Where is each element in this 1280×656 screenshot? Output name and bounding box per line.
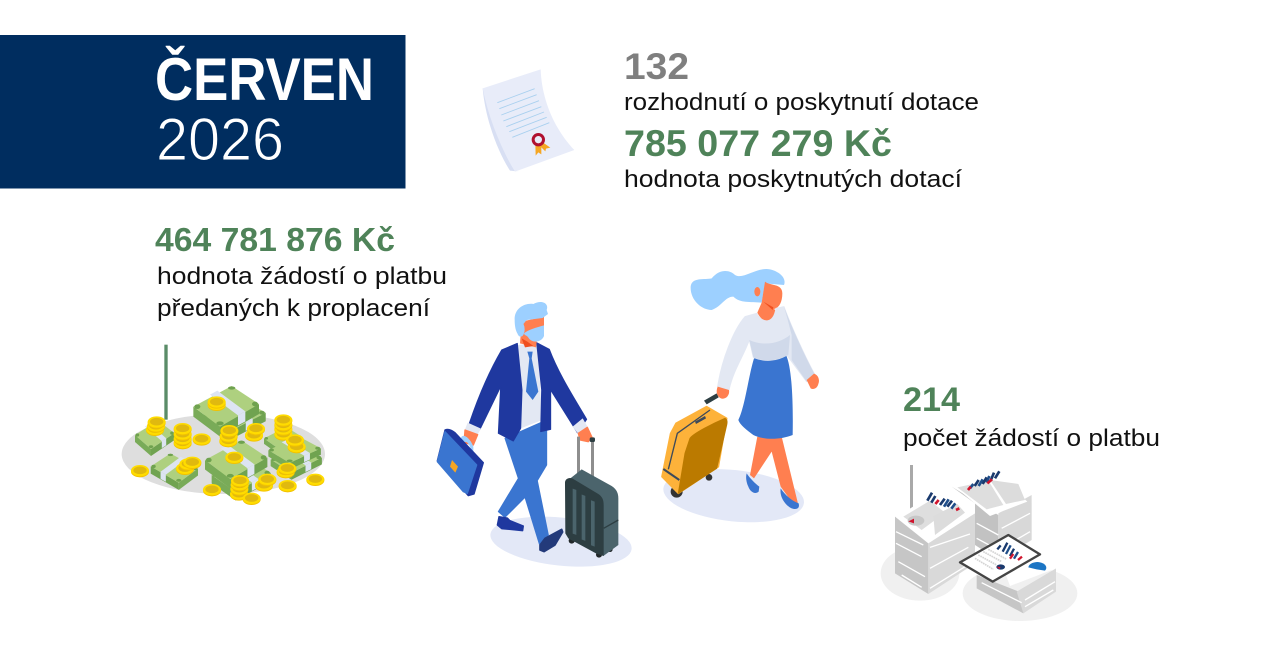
skirt bbox=[738, 355, 793, 439]
icon: paper stacks bbox=[881, 465, 1077, 621]
yellow suitcase bbox=[662, 393, 727, 498]
illustration: woman with suitcase bbox=[661, 269, 819, 529]
cash bundles bbox=[135, 386, 322, 500]
label: grants value: hodnota poskytnutých dotací bbox=[624, 166, 962, 193]
briefcase bbox=[437, 429, 483, 496]
coins bbox=[131, 396, 324, 505]
label: payment requests value bbox=[157, 263, 447, 322]
stat: payment requests value: 464 781 876 Kč bbox=[155, 222, 395, 259]
label: payment requests value: předaných k proplacení bbox=[157, 295, 430, 322]
icon: money pile bbox=[122, 345, 325, 505]
tie bbox=[526, 352, 538, 400]
title: month: ČERVEN bbox=[155, 46, 374, 113]
label: payment requests value: hodnota žádostí o platbu bbox=[157, 263, 447, 290]
title banner bbox=[0, 35, 406, 188]
jacket bbox=[469, 343, 522, 441]
trousers bbox=[498, 420, 548, 544]
front left stack bbox=[895, 489, 975, 594]
shirt bbox=[517, 343, 542, 428]
blouse bbox=[718, 307, 815, 390]
tablet on front stack bbox=[960, 535, 1056, 613]
rolling suitcase bbox=[565, 437, 618, 558]
label: decisions: rozhodnutí o poskytnutí dotace bbox=[624, 89, 979, 116]
stat: payment requests count: 214 bbox=[903, 381, 960, 419]
head bbox=[520, 317, 544, 347]
label: payment requests count: počet žádostí o platbu bbox=[903, 425, 1160, 452]
title: year: 2026 bbox=[156, 106, 284, 173]
legs bbox=[750, 437, 798, 505]
back stack bbox=[952, 469, 1032, 560]
hair bbox=[691, 269, 785, 310]
head and neck bbox=[757, 282, 782, 323]
icon: certificate bbox=[483, 69, 574, 172]
hands bbox=[807, 374, 819, 389]
illustration: man with suitcase bbox=[437, 302, 634, 573]
stat: grants value: 785 077 279 Kč bbox=[624, 123, 892, 164]
stat: decisions count: 132 bbox=[624, 46, 689, 87]
